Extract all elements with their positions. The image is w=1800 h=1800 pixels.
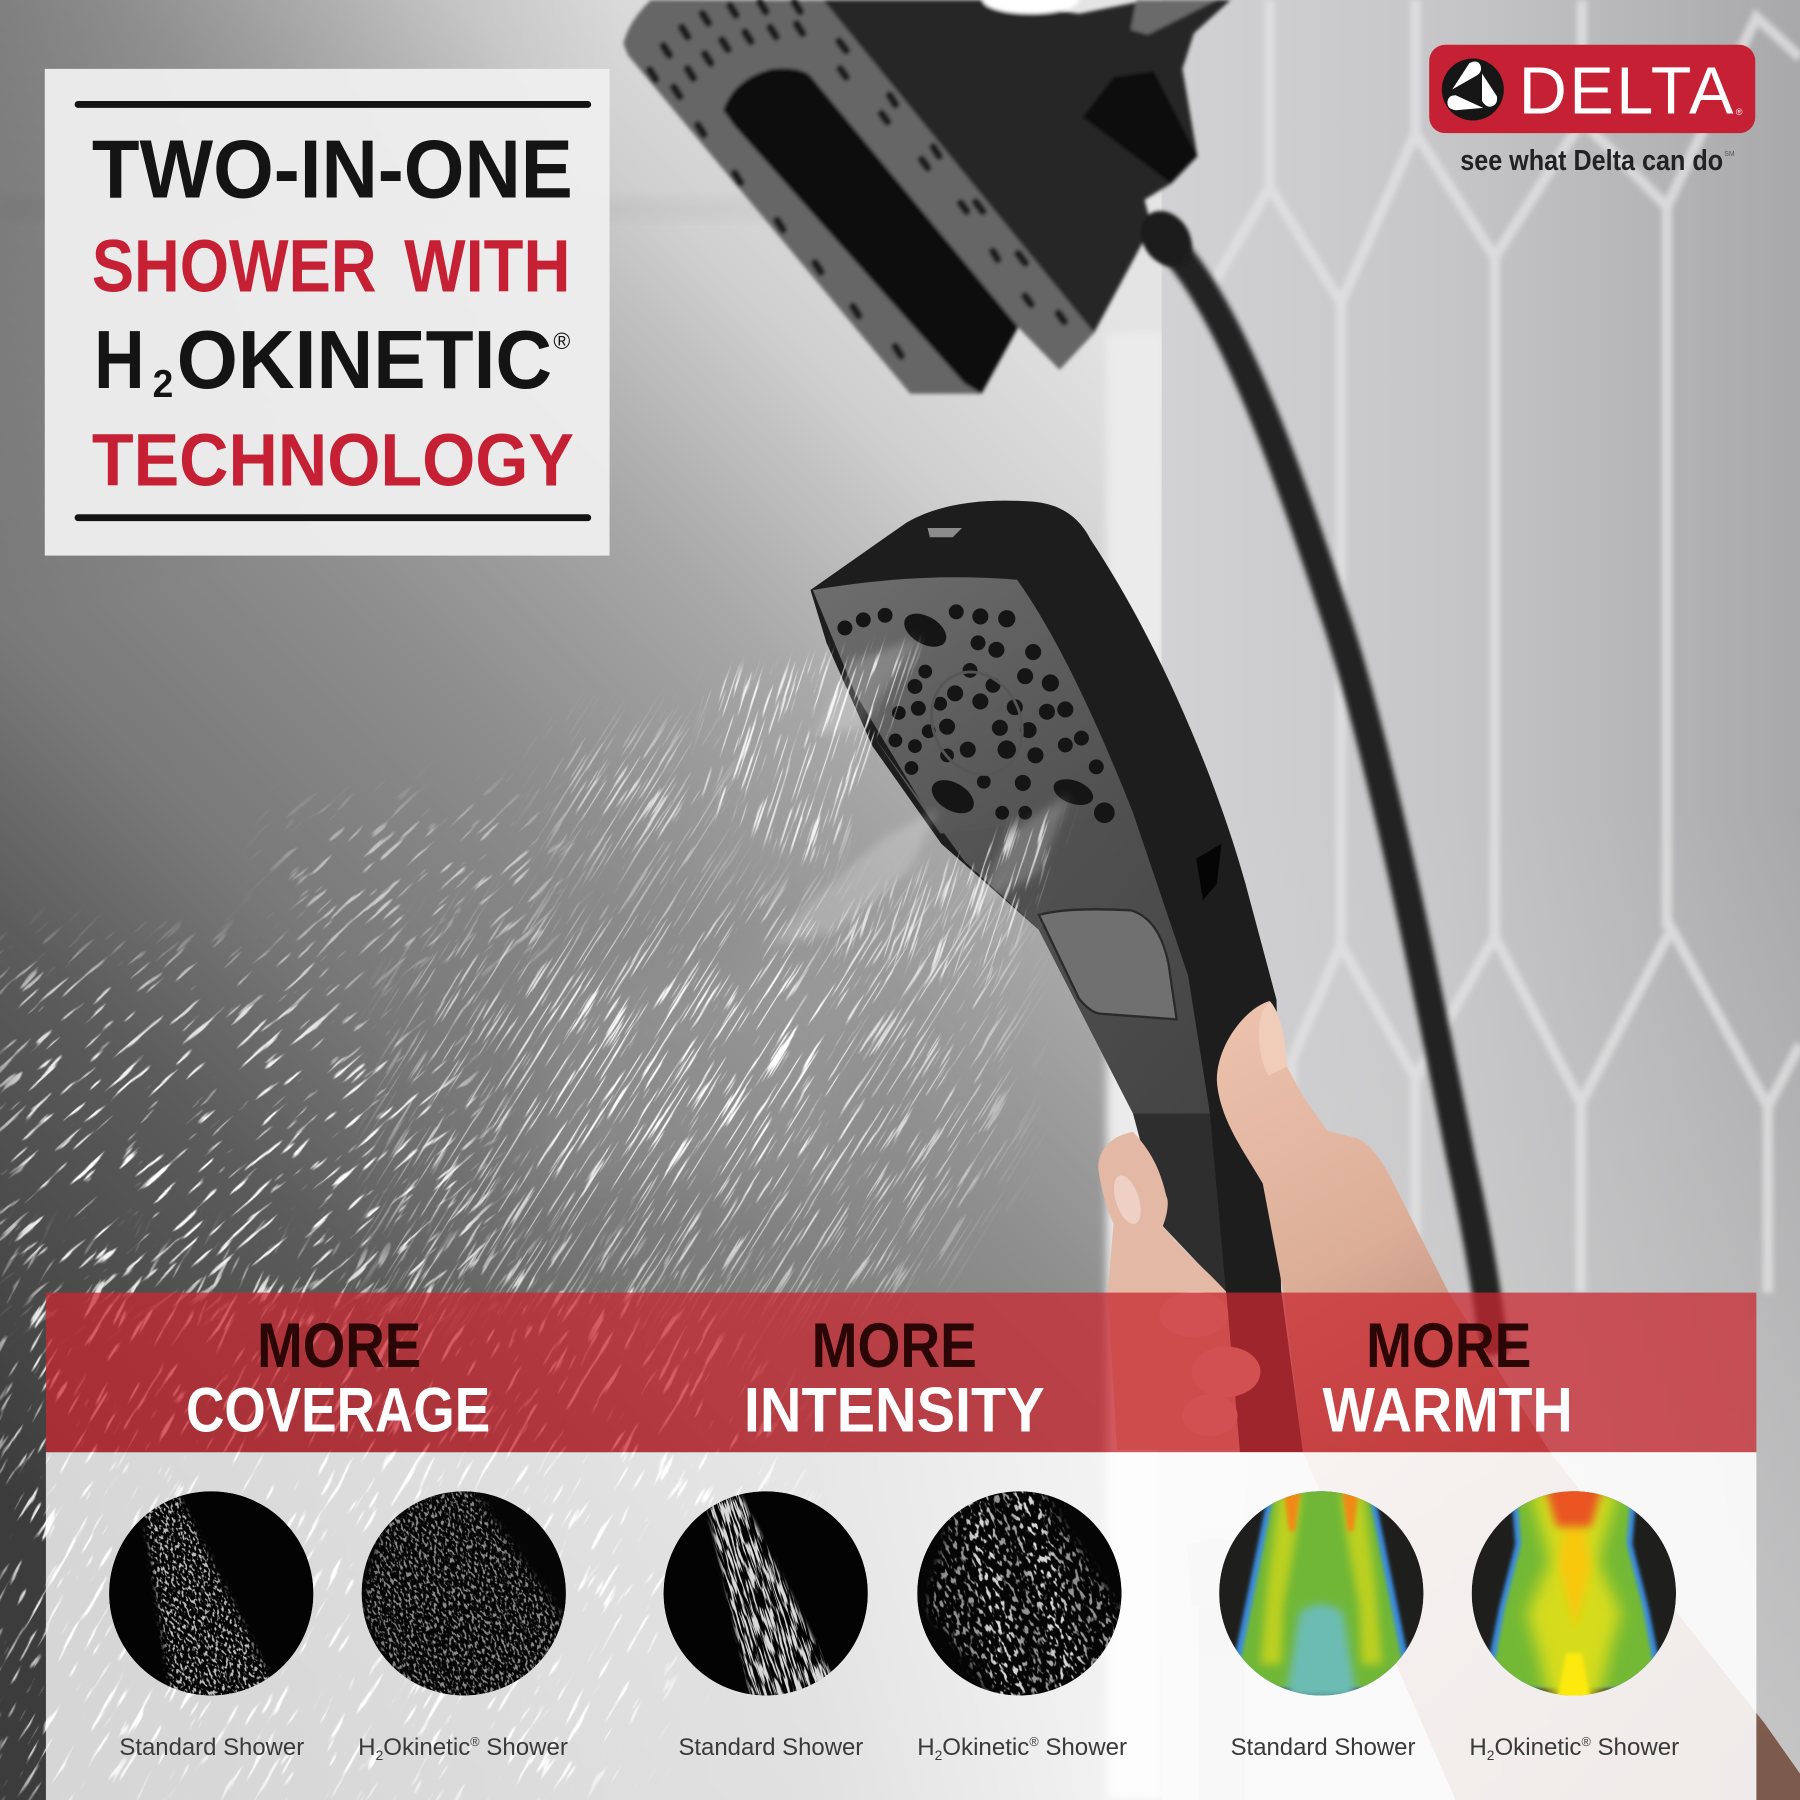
handheld shower wand (810, 501, 1281, 1295)
Delta logo (1429, 45, 1755, 177)
hose connector (1130, 201, 1202, 276)
heading (1322, 1311, 1573, 1446)
heading: INTENSITY (744, 1376, 1045, 1446)
caption: 2 (1487, 1748, 1494, 1763)
flexible shower hose (1157, 233, 1495, 1355)
overhead shower head (623, 0, 1231, 394)
title line: shower with: WITH (404, 224, 571, 308)
caption: Shower (1039, 1734, 1127, 1761)
title line: H2Okinetic: 2 (153, 363, 173, 406)
heading: WARMTH (1322, 1376, 1573, 1446)
title line: H2Okinetic: ® (553, 328, 570, 354)
column: more coverage (109, 1311, 568, 1763)
control button (1039, 909, 1177, 1019)
circle: standard shower coverage (109, 1491, 313, 1696)
heading: MORE (812, 1311, 977, 1381)
circle: H2Okinetic coverage (362, 1491, 566, 1696)
caption: 2 (376, 1748, 383, 1763)
lower wand body (872, 735, 1210, 1114)
tile wall with hexagon grout lines (1162, 0, 1800, 1800)
fine streaks in the middle (350, 709, 1040, 1312)
caption: Shower (480, 1734, 568, 1761)
heading: COVERAGE (186, 1376, 490, 1446)
dark rear body (804, 0, 1231, 370)
panel: title card (45, 69, 610, 556)
white hose bracket seen through the panel (1173, 1452, 1260, 1800)
circle: H2Okinetic intensity (917, 1491, 1122, 1696)
bottom rule (75, 514, 591, 521)
caption: 2 (935, 1748, 942, 1763)
mounting bracket (1083, 71, 1197, 184)
column: more intensity (664, 1311, 1127, 1763)
caption: Standard Shower (1231, 1734, 1415, 1761)
top rule (75, 101, 591, 108)
caption: H (358, 1734, 376, 1761)
heading (186, 1311, 490, 1446)
title line: two-in-one: TWO-IN-ONE (92, 122, 573, 215)
caption: Okinetic (383, 1734, 470, 1761)
heading: MORE (1366, 1311, 1531, 1381)
title line: shower with: SHOWER (92, 224, 377, 308)
icon: Delta triangle mark (1442, 59, 1504, 121)
jet streams from the nozzles (769, 638, 1070, 947)
circle: standard shower thermal image (1219, 1487, 1423, 1699)
streaks falling behind the lower panel (0, 1220, 804, 1800)
column: more warmth (1219, 1311, 1679, 1763)
spray face plate (813, 577, 1133, 833)
caption: Standard Shower (119, 1734, 304, 1761)
title line: technology: TECHNOLOGY (92, 418, 574, 502)
dark center slot of shower head (723, 68, 1018, 394)
caption: Okinetic (1494, 1734, 1581, 1761)
red header band (46, 1293, 1756, 1452)
caption: Standard Shower (678, 1734, 863, 1761)
dark handle seen through the band (1226, 1290, 1303, 1452)
wand body (810, 501, 1281, 1295)
Delta logo: SM (1724, 151, 1735, 158)
logo wordmark: DELTA (1519, 55, 1734, 129)
shower head nozzles (650, 2, 1064, 356)
caption: ® (1581, 1735, 1591, 1749)
side slot (1196, 844, 1221, 900)
tagline: see what Delta can do (1460, 145, 1723, 177)
lower fingers seen through the band (1159, 1291, 1260, 1436)
panel: benefits background (46, 1452, 1756, 1800)
heading (744, 1311, 1045, 1446)
Delta logo: ® (1736, 107, 1743, 117)
title line: H2Okinetic: H (94, 313, 145, 406)
grey spray plate (623, 0, 1094, 394)
title line: H2Okinetic: OKINETIC (177, 313, 552, 406)
caption: ® (1029, 1735, 1039, 1749)
water spray (0, 620, 1102, 1800)
steep streaks near the nozzles (696, 636, 1066, 988)
circle: H2Okinetic thermal image (1472, 1483, 1676, 1701)
circle: standard shower intensity (664, 1491, 868, 1696)
caption: Okinetic (942, 1734, 1029, 1761)
large droplet streaks on the left (0, 778, 582, 1334)
caption: ® (470, 1735, 480, 1749)
gripping finger (1098, 1132, 1240, 1450)
heading: MORE (257, 1311, 421, 1381)
caption: H (917, 1734, 935, 1761)
soft mist glow (540, 953, 849, 1182)
hand holding the wand (1098, 1001, 1800, 1800)
thumb and forearm (1217, 1001, 1800, 1800)
caption: Shower (1591, 1734, 1679, 1761)
jets on the face (837, 604, 1115, 823)
caption: H (1469, 1734, 1487, 1761)
